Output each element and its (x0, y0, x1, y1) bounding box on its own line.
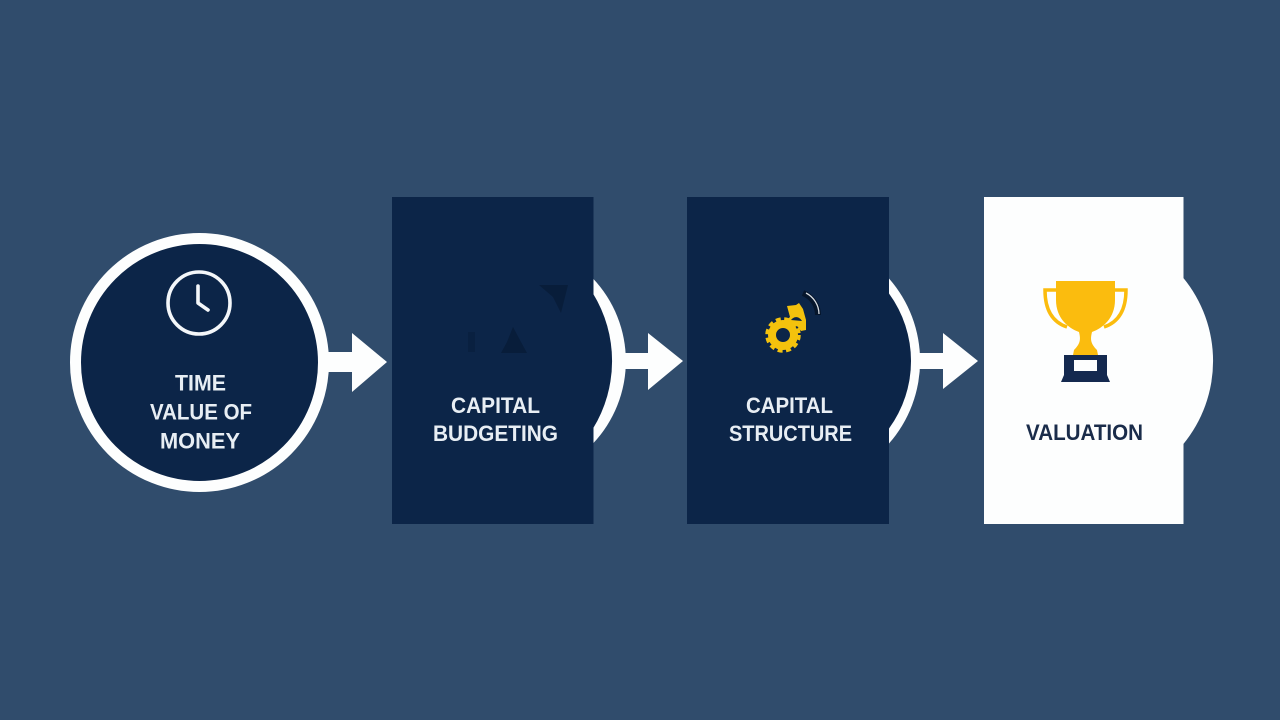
label: valuation: VALUATION (1026, 420, 1143, 445)
bulge ring (593, 278, 626, 444)
arrow: capital structure to valuation (913, 333, 978, 389)
step 1: time value of money (76, 238, 324, 486)
label: time value of money: MONEY (160, 428, 240, 454)
handles (1045, 290, 1126, 327)
icon: gears (767, 293, 819, 351)
step 4: valuation (984, 197, 1213, 524)
small dark arc (803, 293, 818, 315)
plaque (1074, 360, 1097, 371)
arrow: time value to capital budgeting (322, 333, 387, 392)
icon: trophy (1045, 281, 1126, 382)
bulge fill (889, 294, 911, 428)
card (687, 197, 889, 524)
upper gear (784, 303, 806, 331)
label: capital structure (729, 393, 852, 446)
label: capital budgeting: BUDGETING (433, 421, 558, 446)
circle badge (76, 238, 324, 486)
label: capital budgeting: CAPITAL (451, 393, 540, 418)
label: time value of money: VALUE OF (150, 400, 252, 424)
bulge (1183, 278, 1213, 444)
base (1061, 355, 1110, 382)
label: time value of money: TIME (175, 370, 226, 396)
icon: clock (168, 272, 230, 334)
icon: faint growth chart (468, 285, 568, 353)
card (984, 197, 1184, 524)
label: capital budgeting (433, 393, 558, 446)
step 2: capital budgeting (392, 197, 626, 524)
label: capital structure: CAPITAL (746, 393, 833, 418)
bulge fill (593, 294, 612, 428)
lower gear (772, 324, 794, 346)
bulge ring (889, 278, 920, 444)
label: time value of money (150, 370, 252, 454)
card (392, 197, 594, 524)
step 3: capital structure (687, 197, 920, 524)
label: capital structure: STRUCTURE (729, 421, 852, 446)
arrow: capital budgeting to capital structure (618, 333, 683, 390)
cup (1056, 281, 1115, 355)
